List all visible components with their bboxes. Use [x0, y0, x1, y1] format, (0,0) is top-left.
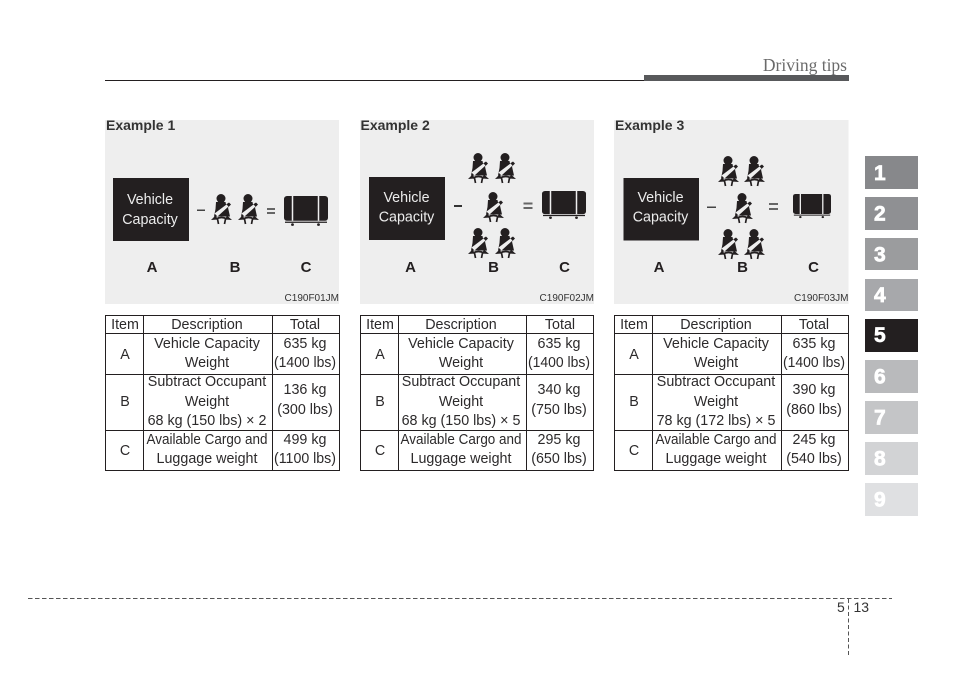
table: example 1: (1400 lbs) [274, 355, 336, 371]
table: example 2: Description [425, 317, 497, 333]
letter labels: A [147, 259, 158, 276]
table: example 2: 635 kg [538, 336, 581, 352]
figure code: C190F03JM [794, 293, 848, 304]
table: example 2: Available Cargo and [400, 432, 522, 448]
table: example 1: 68 kg (150 lbs) × 2 [148, 413, 266, 429]
table: example 1: Item [111, 317, 139, 333]
table: example 2: 340 kg [538, 382, 581, 398]
tab 5 active: 5 [874, 324, 886, 347]
equals sign [524, 204, 532, 208]
table: example 1: Description [171, 317, 243, 333]
tab 4 [865, 279, 918, 311]
tab 9: 9 [874, 488, 886, 512]
figure code: C190F01JM [285, 293, 339, 304]
heading: Example 3: Example 3 [615, 117, 684, 133]
letter labels [405, 259, 570, 276]
table: example 3: (540 lbs) [786, 451, 842, 467]
table: example 1: 136 kg [284, 382, 327, 398]
table: example 3: Weight [694, 355, 738, 371]
minus sign [197, 210, 205, 211]
box: vehicle capacity A: Capacity [633, 210, 689, 226]
table: example 1: Weight [185, 355, 229, 371]
table: example 3: A [629, 347, 639, 363]
letter labels: B [737, 259, 748, 276]
table: example 1: 499 kg [284, 432, 327, 448]
minus sign [454, 205, 462, 207]
table: example 1: A [120, 347, 130, 363]
table: example 3: Available Cargo and [656, 432, 777, 448]
box: vehicle capacity A [113, 178, 189, 241]
tab 6: 6 [874, 366, 886, 388]
tab 2: 2 [874, 202, 886, 226]
heading: Example 2: Example 2 [360, 117, 430, 133]
box: vehicle capacity A [369, 177, 445, 240]
page number: 5 [837, 599, 845, 615]
table: example 3: Weight [694, 394, 738, 410]
table: example 2: Item [366, 317, 394, 333]
table: example 1: Weight [185, 394, 229, 410]
tab 3: 3 [874, 244, 886, 266]
table: example 3: Vehicle Capacity [663, 336, 770, 352]
box: vehicle capacity A: Vehicle [127, 192, 173, 208]
box: vehicle capacity A: Vehicle [637, 190, 684, 206]
equals sign [769, 204, 778, 209]
table: example 2: (750 lbs) [531, 402, 587, 418]
table: example 2: Luggage weight [411, 451, 512, 467]
panel: example 3 diagram [614, 117, 848, 304]
tab 1: 1 [874, 162, 886, 185]
letter labels [654, 259, 819, 276]
table: example 3: 245 kg [793, 432, 836, 448]
table: example 2: Subtract Occupant [402, 374, 520, 390]
tab 7 [865, 401, 918, 434]
table: example 3: 635 kg [793, 336, 836, 352]
letter labels [147, 259, 312, 276]
tab 5 active [865, 319, 918, 352]
tab 6 [865, 360, 918, 393]
table: example 1: Total [290, 317, 320, 333]
letter labels: B [230, 259, 241, 276]
equals sign [267, 209, 275, 213]
table: example 1: (1100 lbs) [274, 451, 336, 467]
table: example 2: Weight [439, 355, 483, 371]
table: example 1: B [120, 394, 130, 410]
box: vehicle capacity A: Vehicle [383, 190, 430, 206]
table: example 2: 295 kg [538, 432, 581, 448]
table: example 2: 68 kg (150 lbs) × 5 [402, 413, 520, 429]
table: example 1: Vehicle Capacity [154, 336, 261, 352]
table: example 1: Subtract Occupant [148, 374, 266, 390]
letter labels: C [301, 259, 312, 276]
table: example 2: B [375, 394, 385, 410]
footer dashed rules [28, 598, 892, 657]
panel: example 2 diagram [360, 117, 594, 304]
icon: cargo C [284, 196, 328, 226]
icon: occupants B [718, 156, 765, 259]
tab 7: 7 [874, 406, 886, 430]
icon: cargo C [542, 191, 586, 219]
table: example 2: Vehicle Capacity [408, 336, 515, 352]
table: example 3: 78 kg (172 lbs) × 5 [657, 413, 775, 429]
icon: cargo C [793, 194, 831, 218]
table: example 1: (300 lbs) [277, 402, 333, 418]
box: vehicle capacity A: Capacity [122, 212, 179, 228]
letter labels: B [488, 259, 499, 276]
table: example 2: (1400 lbs) [528, 355, 590, 371]
table: example 3 [614, 316, 848, 470]
table: example 3: C [629, 443, 639, 459]
section heading: Driving tips: Driving tips [763, 55, 847, 75]
chapter tabs [865, 156, 918, 516]
letter labels: A [405, 259, 416, 276]
figure code: C190F02JM [540, 293, 594, 304]
table: example 1: 635 kg [284, 336, 327, 352]
table: example 3: (860 lbs) [786, 402, 842, 418]
page number [837, 599, 869, 615]
heading: Example 1: Example 1 [106, 117, 175, 133]
table: example 1: C [120, 443, 130, 459]
table: example 3: B [629, 394, 639, 410]
table: example 2: C [375, 443, 385, 459]
table: example 2: Total [545, 317, 575, 333]
box: vehicle capacity A [624, 178, 699, 240]
box: vehicle capacity A: Capacity [379, 210, 435, 226]
page number: 13 [854, 599, 869, 615]
header rule [105, 75, 849, 81]
letter labels: C [559, 259, 570, 276]
table: example 2: A [375, 347, 385, 363]
letter labels: C [808, 259, 819, 276]
tab 3 [865, 238, 918, 270]
table: example 3: Subtract Occupant [657, 374, 775, 390]
table: example 1: Luggage weight [157, 451, 258, 467]
table: example 3: Total [799, 317, 829, 333]
table: example 3: 390 kg [793, 382, 836, 398]
tab 2 [865, 197, 918, 230]
table: example 3: Description [680, 317, 752, 333]
table: example 2 [360, 316, 594, 470]
tab 8 [865, 442, 918, 475]
icon: occupants B [468, 153, 516, 258]
table: example 2: (650 lbs) [531, 451, 587, 467]
table: example 3: Item [620, 317, 648, 333]
tab 9 [865, 483, 918, 516]
tab 8: 8 [874, 448, 886, 470]
minus sign [707, 206, 716, 208]
table: example 3: Luggage weight [666, 451, 767, 467]
panel: example 1 diagram [105, 117, 339, 304]
tab 1 [865, 156, 918, 189]
table: example 2: Weight [439, 394, 483, 410]
letter labels: A [654, 259, 665, 276]
table: example 3: (1400 lbs) [783, 355, 845, 371]
table: example 1: Available Cargo and [146, 432, 268, 448]
tab 4: 4 [874, 284, 886, 307]
icon: occupants B [211, 194, 259, 224]
table: example 1 [106, 316, 340, 470]
